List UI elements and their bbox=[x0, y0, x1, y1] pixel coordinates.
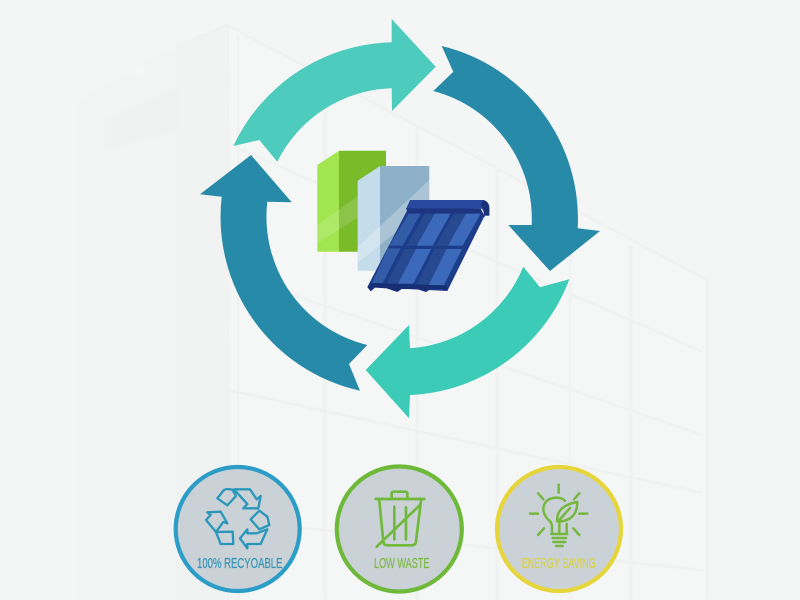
label: 100% RECYOABLE bbox=[197, 555, 282, 572]
label: ENERGY SAVING bbox=[522, 555, 596, 572]
badge: energy saving bbox=[497, 467, 621, 591]
icon: recycling arrows bbox=[206, 489, 269, 548]
arrow: left, dark teal bbox=[200, 155, 367, 391]
icon: green panel bbox=[317, 151, 386, 252]
icon: crossed-out trash bin bbox=[376, 492, 424, 547]
icon: light bulb with leaf bbox=[530, 485, 587, 546]
arrow: right, dark teal bbox=[433, 46, 600, 271]
icon: blue roof tiles bbox=[367, 200, 489, 292]
label: LOW WASTE bbox=[374, 555, 430, 572]
arrow: top, light teal bbox=[233, 19, 436, 162]
central building materials bbox=[317, 151, 489, 292]
badge: low waste bbox=[337, 466, 462, 592]
badge: 100% recyclable bbox=[176, 467, 300, 591]
icon: glass panel bbox=[358, 166, 429, 271]
cycle arrows bbox=[200, 19, 600, 418]
arrow: bottom, bright teal bbox=[366, 267, 569, 418]
